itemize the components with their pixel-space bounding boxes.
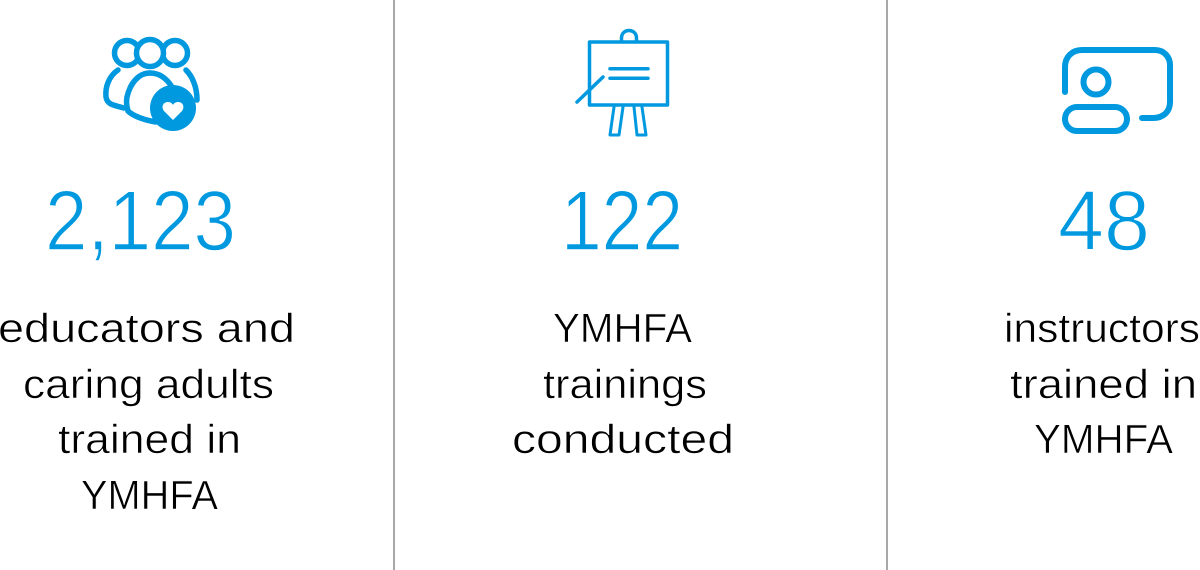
text: instructors trained in YMHFA: instructors (1004, 305, 1200, 351)
text: educators and caring adults trained in YMHFA (0, 305, 295, 518)
icon: instructor profile card (1065, 50, 1170, 131)
number: 122: 122 (561, 174, 683, 269)
text: instructors trained in YMHFA: trained in (1010, 361, 1197, 407)
text: educators and caring adults trained in YMHFA: caring adults (23, 361, 274, 407)
text: YMHFA trainings conducted: conducted (512, 416, 734, 462)
panel: trainings conducted (512, 30, 734, 462)
text: educators and caring adults trained in YMHFA: trained in (58, 416, 241, 462)
text: YMHFA trainings conducted (512, 305, 734, 462)
text: educators and caring adults trained in YMHFA: YMHFA (81, 472, 219, 518)
text: educators and caring adults trained in YMHFA: educators and (0, 305, 295, 351)
text: YMHFA trainings conducted: YMHFA (553, 305, 693, 351)
panel: instructors trained (1004, 50, 1200, 462)
text: YMHFA trainings conducted: trainings (543, 361, 707, 407)
panel: educators and caring adults (0, 40, 295, 518)
icon: group of people with heart (106, 40, 197, 131)
icon: presentation easel (577, 30, 668, 135)
text: instructors trained in YMHFA: YMHFA (1034, 416, 1174, 462)
number: 48: 48 (1058, 174, 1150, 269)
number: 2,123: 2,123 (45, 174, 236, 269)
text: instructors trained in YMHFA (1004, 305, 1200, 462)
